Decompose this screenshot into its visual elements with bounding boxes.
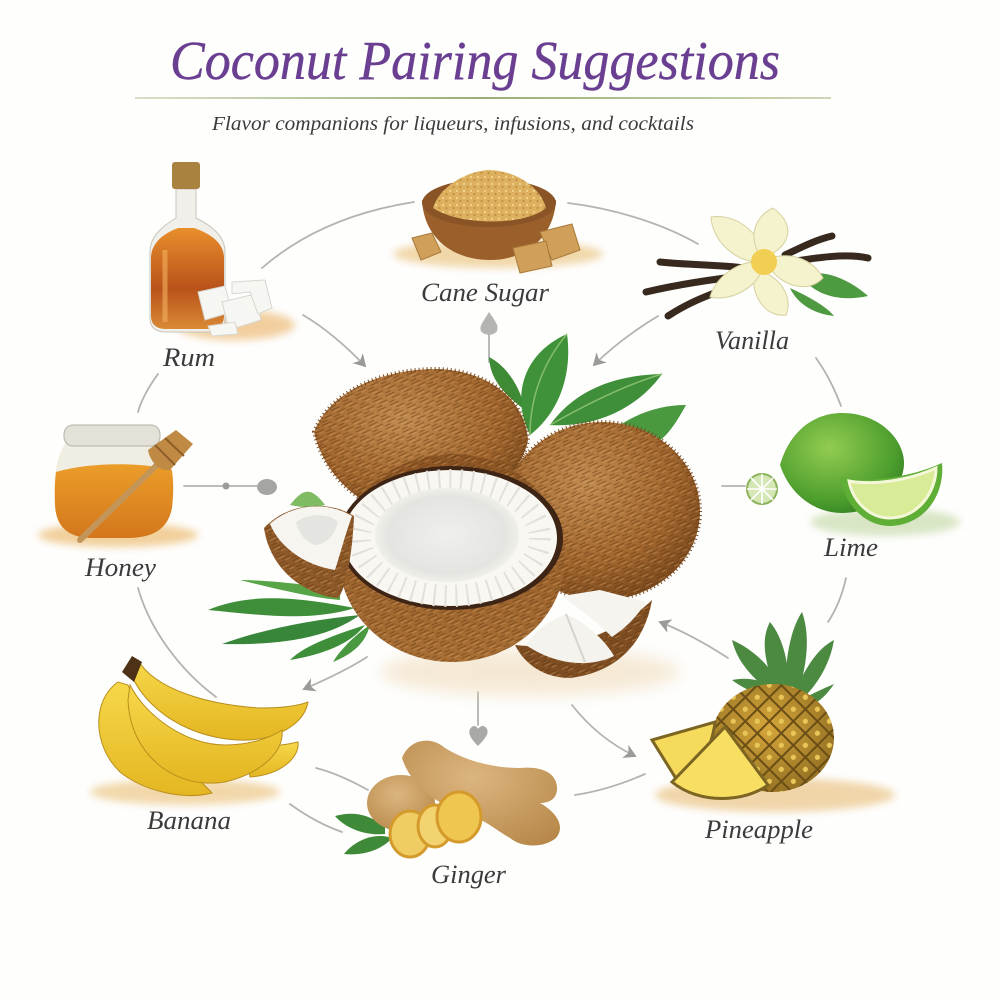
sand wash [90,779,280,805]
title divider [135,97,831,99]
ingredient: honey [38,425,198,547]
coconut shards, right [515,590,652,678]
ginger root [367,741,560,846]
lime wedge [840,463,942,526]
ingredient: banana [90,656,308,805]
sand wash [393,240,603,268]
ingredient: rum [150,162,295,340]
sand wash [655,778,895,812]
ingredient: pineapple [652,612,895,812]
bowl rim [422,179,556,227]
bottle [150,162,225,332]
wedge flesh [849,468,936,518]
ingredient: vanilla [646,208,868,316]
green leaves [790,273,868,316]
large halved coconut [339,454,565,662]
connecting arrows and curves [138,202,846,832]
green wash [810,508,960,536]
back-left whole coconut [314,369,528,515]
pineapple crown [732,612,834,712]
central coconut group [208,334,700,696]
banana bunch [99,660,308,795]
subtitle: Flavor companions for liqueurs, infusions, and cocktails [211,113,694,135]
ginger slices [390,792,481,857]
back-right whole coconut [504,422,700,600]
banana stem [122,656,142,682]
ingredient: cane sugar [393,170,603,273]
green leaves [335,814,392,854]
flower centre [751,249,777,275]
label: vanilla: Vanilla [715,326,789,355]
whole lime [780,413,904,513]
wooden bowl [422,200,556,260]
sugar cubes [198,280,272,336]
upper palm leaves [489,334,686,447]
sand wash under coconuts [380,648,680,696]
label: rum: Rum [162,343,215,372]
label: honey: Honey [84,553,156,582]
sugar cubes [412,224,580,273]
sugar heap [433,170,546,222]
flower petals [710,208,823,315]
sand wash [38,523,198,547]
label: ginger: Ginger [431,860,507,889]
title: Coconut Pairing Suggestions [170,30,780,91]
lower palm leaves [208,492,370,662]
label: lime: Lime [823,533,878,562]
label: banana: Banana [147,806,231,835]
sand wash [175,310,295,340]
ingredient: lime [780,413,960,536]
pineapple wedges [652,722,768,798]
label: pineapple: Pineapple [704,815,813,844]
connector ornaments [222,312,777,746]
vanilla pods [646,236,868,316]
label: cane sugar: Cane Sugar [421,278,550,307]
honey dipper [80,430,193,540]
jar [55,425,173,538]
small coconut piece, left [264,506,354,598]
ingredient: ginger [335,741,560,857]
pineapple body [712,684,834,792]
